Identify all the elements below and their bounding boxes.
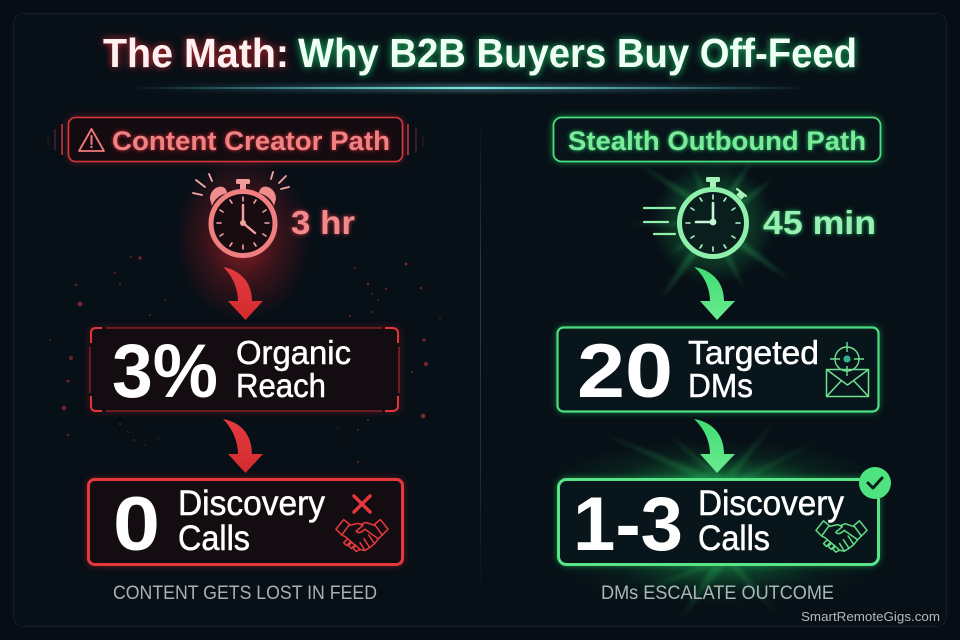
card: 3% organic reach: Organic: [236, 334, 351, 371]
heading: stealth outbound path: [553, 117, 881, 162]
icon: warning triangle: [79, 129, 104, 151]
arrow: down to calls: [223, 419, 263, 473]
icon: stopwatch with burst: [620, 160, 790, 300]
card: 20 targeted dms: DMs: [688, 367, 753, 404]
card: 3% organic reach: 3%: [112, 329, 218, 414]
panel: content creator path: [48, 117, 441, 604]
icon: target: [830, 342, 864, 376]
time label: 45 min: 45 min: [763, 204, 876, 241]
heading: content creator path: Content Creator Path: [112, 126, 390, 156]
card: 1-3 discovery calls: [558, 467, 891, 567]
time label: 3 hr: 3 hr: [291, 204, 355, 241]
heading: stealth outbound path: Stealth Outbound Path: [568, 126, 866, 156]
rays: outcome burst: [548, 420, 888, 620]
card: 3% organic reach: Reach: [236, 367, 326, 404]
panel: stealth outbound path: [548, 117, 891, 620]
arrow: down to dms: [694, 267, 735, 320]
card: 1-3 discovery calls: Calls: [698, 519, 770, 558]
arrow: down to reach: [223, 267, 263, 320]
icon: envelope: [826, 370, 868, 396]
card: 0 discovery calls: Calls: [178, 519, 250, 558]
centre divider: [480, 130, 481, 600]
time label: 45 min: 45 min: [763, 204, 876, 241]
card: 0 discovery calls: Discovery: [178, 484, 325, 523]
icon: handshake: [336, 520, 388, 551]
card: 3% organic reach: [89, 327, 400, 414]
icon: handshake: [816, 521, 867, 552]
caption: dms escalate outcome: DMs ESCALATE OUTCOME: [601, 583, 834, 604]
card: 20 targeted dms: Targeted: [688, 334, 819, 371]
card: 20 targeted dms: 20: [577, 329, 673, 414]
card: 0 discovery calls: [88, 479, 403, 567]
card: 0 discovery calls: 0: [113, 482, 160, 567]
time label: 3 hr: 3 hr: [291, 204, 355, 241]
title: Why B2B Buyers Buy Off-Feed: [298, 30, 857, 76]
title: The Math:: [103, 30, 289, 76]
icon: alarm clock: [175, 154, 311, 322]
watermark: SmartRemoteGigs.com: [801, 609, 940, 624]
icon: x mark: [354, 496, 370, 512]
card: 1-3 discovery calls: 1-3: [573, 482, 683, 567]
arrow: down to outcome: [694, 419, 735, 473]
heading: content creator path: Content Creator Path: [112, 126, 390, 156]
title: Why B2B Buyers Buy Off-Feed: [298, 30, 857, 76]
card: 20 targeted dms: [557, 327, 879, 414]
particles: red: [49, 256, 441, 463]
title underline: [130, 84, 810, 92]
title: The Math:: [103, 30, 289, 76]
card: 1-3 discovery calls: Discovery: [698, 484, 844, 523]
caption: content gets lost: CONTENT GETS LOST IN FEED: [113, 583, 377, 604]
heading: content creator path: [48, 117, 423, 162]
heading: stealth outbound path: Stealth Outbound Path: [568, 126, 866, 156]
icon: check badge: [859, 467, 891, 499]
